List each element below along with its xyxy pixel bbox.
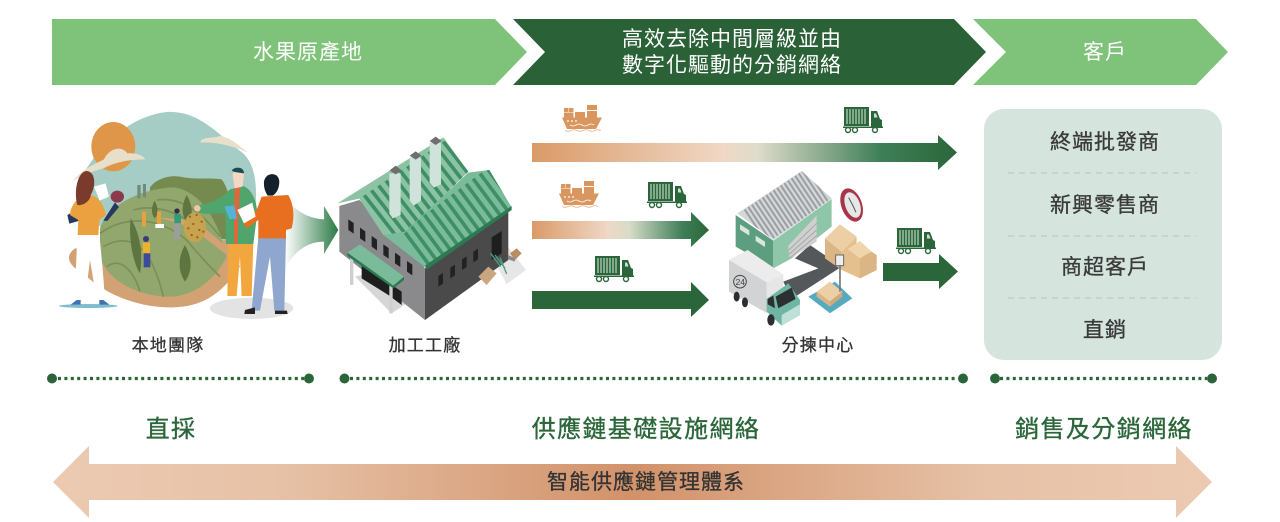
clouds — [72, 149, 145, 182]
warehouse roof — [737, 171, 832, 240]
ground apron — [355, 270, 412, 313]
heading: direct sourcing: 直採 — [146, 416, 196, 443]
canopy — [347, 244, 404, 313]
man in orange — [210, 174, 293, 319]
icon: truck route 3 — [594, 256, 634, 282]
boxes — [478, 248, 522, 285]
header text: origin: 水果原產地 — [253, 41, 363, 64]
icon: ship route 2 — [559, 181, 599, 207]
arrow: route 1 sea and road to customers — [532, 135, 957, 170]
icon: truck route 4 — [896, 228, 936, 254]
panel: customers — [984, 109, 1222, 360]
ramp — [490, 245, 526, 284]
loading door — [362, 265, 402, 305]
back hills — [150, 176, 235, 240]
header text: digital distribution: 高效去除中間層級並由 — [622, 28, 842, 51]
icon: truck route 2 — [647, 182, 687, 208]
header text: customers: 客戶 — [1083, 41, 1127, 64]
arrow caption: 智能供應鏈管理體系 — [547, 470, 745, 494]
label: sorting centre: 分揀中心 — [782, 336, 854, 355]
customer: supermarkets: 商超客戶 — [1061, 256, 1149, 279]
small workers — [137, 184, 146, 198]
double arrow: smart supply chain system — [53, 446, 1212, 518]
woman — [59, 171, 124, 308]
arrow: route 2 sea and road to sorting centre — [532, 212, 709, 247]
road — [783, 245, 842, 299]
stacked boxes — [825, 224, 877, 278]
label: processing factory: 加工工廠 — [389, 335, 461, 355]
weighing scale with box — [808, 255, 852, 313]
illustration: local team in orchard — [59, 112, 338, 319]
illustration: sorting centre — [729, 171, 877, 326]
customer: new retailers: 新興零售商 — [1050, 194, 1160, 217]
header text: digital distribution: 數字化驅動的分銷網絡 — [622, 54, 842, 77]
field — [100, 187, 227, 297]
icon: ship route 1 — [562, 105, 602, 131]
trees — [130, 218, 141, 273]
timeline: sales network — [990, 374, 1217, 384]
path — [157, 217, 227, 255]
sky — [77, 112, 256, 257]
windows — [348, 219, 412, 275]
header chevron: origin — [52, 19, 527, 85]
label: local team: 本地團隊 — [132, 336, 204, 355]
arrow: route 3 road to sorting centre — [532, 282, 709, 317]
customer: wholesalers: 終端批發商 — [1050, 131, 1160, 154]
delivery truck — [729, 250, 800, 326]
front roof — [383, 170, 512, 268]
durian — [184, 212, 206, 242]
customer: direct sales: 直銷 — [1083, 319, 1127, 342]
shutter door — [788, 216, 817, 259]
warehouse walls — [736, 215, 773, 268]
timeline: infrastructure — [340, 374, 968, 384]
timeline: direct sourcing — [47, 374, 314, 384]
header chevron: digital distribution — [513, 19, 986, 85]
man in green — [194, 168, 257, 305]
heading: sales and distribution: 銷售及分銷網絡 — [1015, 416, 1193, 443]
back roof — [337, 137, 468, 235]
chimneys — [389, 137, 442, 218]
sun — [91, 122, 135, 171]
flared arrow toward factory — [273, 180, 338, 297]
delivery truck: 24 — [735, 277, 745, 287]
right wall — [425, 210, 508, 320]
arrow: sorting centre to customers — [883, 254, 958, 289]
header chevron: customers — [973, 19, 1228, 85]
illustration: processing factory — [337, 137, 526, 320]
ground rim — [69, 240, 240, 307]
left wall — [339, 200, 425, 320]
icon: truck route 1 — [843, 107, 883, 132]
heading: supply chain infrastructure: 供應鏈基礎設施網絡 — [532, 416, 760, 443]
clock — [836, 185, 867, 225]
